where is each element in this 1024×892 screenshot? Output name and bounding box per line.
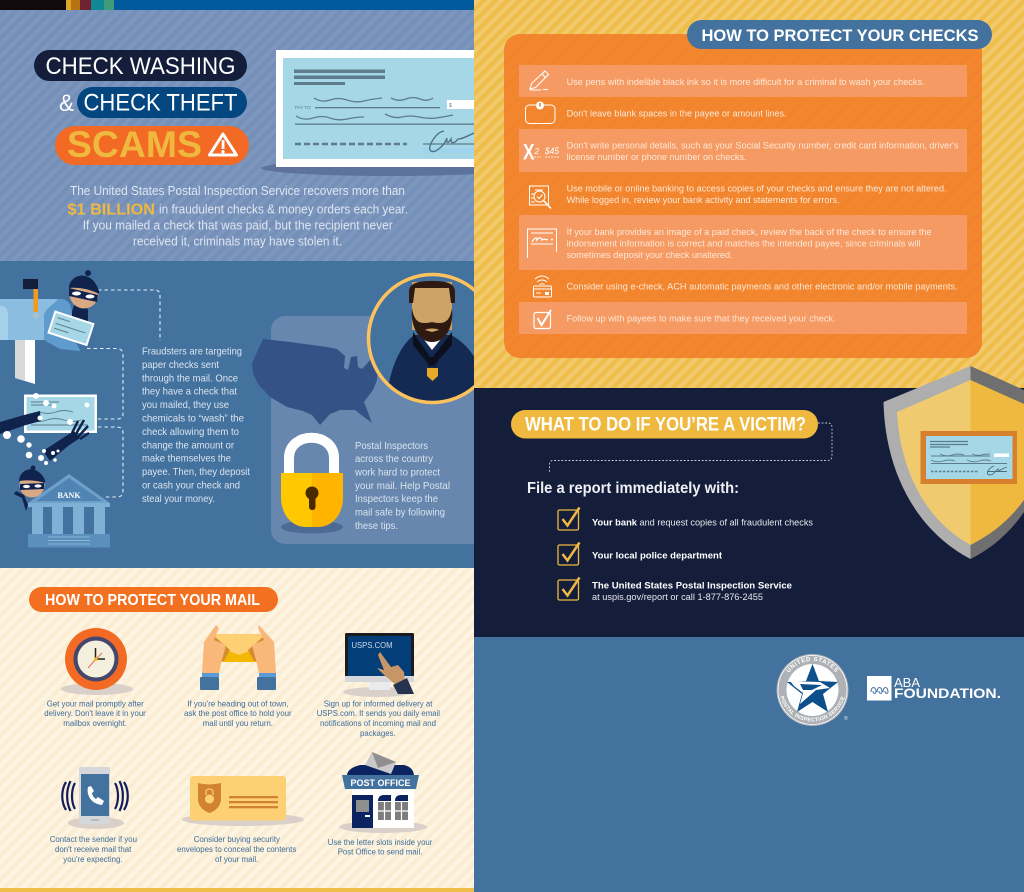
icon: postal inspector portrait [366,272,474,404]
item: post office: POST OFFICE [350,778,410,789]
text block: intro [68,184,408,248]
text block: fraudsters: paper checks sent [142,360,219,371]
logo: postal inspection service seal: POSTAL INSPECTION SERVICE [780,696,845,722]
text block: fraudsters: change the amount or [142,440,235,451]
text block: fraudsters: through the mail. Once [142,373,238,384]
text block: fraudsters: check allowing them to [142,427,239,438]
item: your bank: and request copies of all fraudulent checks [640,518,814,528]
item: security envelope: of your mail. [215,854,258,864]
item: ringing phone: don't receive mail that [55,844,132,854]
tip: paid check image [519,215,967,270]
tip: blank spaces: Don't leave blank spaces in the payee or amount lines. [567,108,787,120]
text block: postal inspectors: these tips. [355,521,398,532]
icon: padlock [281,438,343,534]
heading: protect your checks [687,20,992,49]
map: united states [252,339,378,425]
item: hands holding envelope: ask the post office to hold your [184,708,292,718]
item: hands holding envelope [184,625,292,728]
title: check washing: CHECK WASHING [46,53,236,80]
logo: postal inspection service seal: ® [844,715,848,722]
panel: right yellow background [474,0,1024,389]
item: monitor USPS.COM [317,633,440,738]
panel: what to do if you are a victim [474,366,1024,637]
text block: fraudsters: payee. Then, they deposit [142,467,250,478]
item: hands holding envelope: If you're heading out of town, [187,698,289,708]
item: monitor USPS.COM: USPS.com. It sends you daily email [317,708,440,718]
panel: hero [0,0,519,261]
panel: postal inspectors [252,316,491,544]
item: clock: mailbox overnight. [63,718,127,728]
title: check theft: & [59,90,74,117]
item: monitor USPS.COM: notifications of incoming mail and [320,718,436,728]
heading: victim [511,410,818,438]
item: your bank: Your bank [592,518,638,528]
item: post office [328,752,432,856]
icon: mailbox with thief [0,270,99,384]
tip: follow up: Follow up with payees to make sure that they received your check. [567,314,836,324]
tip: personal details: 2 [534,146,540,156]
text block: intro: received it, criminals may have stolen it. [133,234,342,248]
item: ringing phone [50,767,137,864]
tip: indelible ink [519,65,967,97]
text block: intro: If you mailed a check that was paid, but the recipient never [83,218,393,232]
text block: postal inspectors [354,441,450,532]
item: local police [558,542,722,565]
item: security envelope [177,776,304,864]
item: postal inspection service [558,578,792,602]
item: hands holding envelope: mail until you return. [203,718,273,728]
text block: fraudsters: Fraudsters are targeting [142,346,242,358]
tip: paid check image: sometimes deposit your check unaltered. [567,250,733,261]
text block: fraudsters: make themselves the [142,454,231,465]
heading: victim: WHAT TO DO IF YOU’RE A VICTIM? [525,414,806,436]
text block: fraudsters [142,346,250,505]
title: scams: SCAMS [67,124,202,165]
item: monitor USPS.COM: Sign up for informed delivery at [324,698,433,708]
logo: ABA Foundation [867,676,1001,701]
tip: electronic payments [534,276,958,297]
tip: follow up [519,302,967,334]
illustration: check: PAY TO [295,105,311,110]
colour strip [0,0,474,10]
item: clock: Get your mail promptly after [47,698,144,708]
item: monitor USPS.COM: USPS.COM [352,640,392,650]
item: security envelope: envelopes to conceal the contents [177,844,297,854]
text block: intro: The United States Postal Inspection Service recovers more than [70,184,405,198]
item: clock: delivery. Don't leave it in your [44,708,146,718]
text block: fraudsters: chemicals to “wash” the [142,414,244,424]
title: scams [55,124,249,165]
tip: paid check image: If your bank provides an image of a paid check, review the back of the check to ensure the [567,227,932,238]
icon: bank with thief: BANK [57,491,81,500]
tip: mobile banking: While logged in, review your bank activity and statements for errors. [567,195,840,206]
subheading: file a report: File a report immediately with: [527,480,739,497]
item: postal inspection service: The United States Postal Inspection Service [592,580,792,590]
panel: how to protect your checks [504,20,992,358]
text block: fraudsters: steal your money. [142,494,215,505]
item: post office: Use the letter slots inside your [328,837,432,847]
title: check theft: CHECK THEFT [84,90,238,116]
text block: fraudsters: you mailed, they use [142,400,229,411]
illustration: check: $ [449,103,452,109]
tip: personal details: license number or phone number on checks. [567,152,747,163]
tip: indelible ink: Use pens with indelible black ink so it is more difficult for a criminal to wash your checks. [567,77,925,88]
tip: personal details [519,129,967,172]
icon: bank with thief [14,466,110,548]
item: ringing phone: Contact the sender if you [50,834,137,844]
text block: postal inspectors: mail safe by following [355,508,445,518]
text block: intro: in fraudulent checks & money orders each year. [159,202,408,216]
panel: how to protect your mail [0,568,474,892]
logo: ABA Foundation: FOUNDATION. [894,685,1001,701]
text block: intro: $1 BILLION [68,202,155,218]
illustration: check [261,50,474,176]
logo: ABA Foundation: ABA [894,676,921,690]
tip: mobile banking: Use mobile or online banking to access copies of your checks and ensure they are not altered. [567,184,947,194]
tip: blank spaces [526,102,787,124]
tip: paid check image: indorsement information is correct and matches the intended payee, since criminals will [567,238,921,250]
tip: personal details: Don't write personal details, such as your Social Security number, credit card information, driver's [567,140,959,152]
logo: postal inspection service seal: UNITED STATES [786,656,838,672]
text block: fraudsters: or cash your check and [142,480,240,492]
item: your bank [558,508,814,530]
heading: protect your mail: HOW TO PROTECT YOUR MAIL [45,592,260,609]
item: clock [44,628,146,728]
connector lines [87,290,161,498]
text block: fraudsters: they have a check that [142,387,237,398]
tip: personal details: X [523,140,535,164]
logo: postal inspection service seal [776,654,848,726]
tip: mobile banking [530,184,947,208]
text block: postal inspectors: your mail. Help Postal [355,481,450,492]
item: monitor USPS.COM: packages. [360,728,396,738]
icon: shield with check [884,366,1024,559]
item: postal inspection service: at uspis.gov/report or call 1-877-876-2455 [592,592,763,602]
tip: electronic payments: Consider using e-check, ACH automatic payments and other electronic and/or mobile payments. [567,282,958,292]
heading: protect your checks: HOW TO PROTECT YOUR CHECKS [702,27,978,45]
text block: postal inspectors: Postal Inspectors [355,441,428,452]
panel: footer logos [474,637,1024,892]
text block: postal inspectors: across the country [355,454,434,465]
panel: how fraud works [0,261,496,568]
item: security envelope: Consider buying security [194,834,281,844]
text block: postal inspectors: Inspectors keep the [355,494,438,505]
item: local police: Your local police department [592,550,722,560]
item: ringing phone: you're expecting. [63,854,123,864]
item: post office: Post Office to send mail. [338,846,422,856]
text block: postal inspectors: work hard to protect [354,468,440,478]
heading: protect your mail [29,587,278,612]
connector: dotted line [550,423,832,472]
icon: check being washed [0,393,97,465]
tip: personal details: $45 [544,146,560,156]
